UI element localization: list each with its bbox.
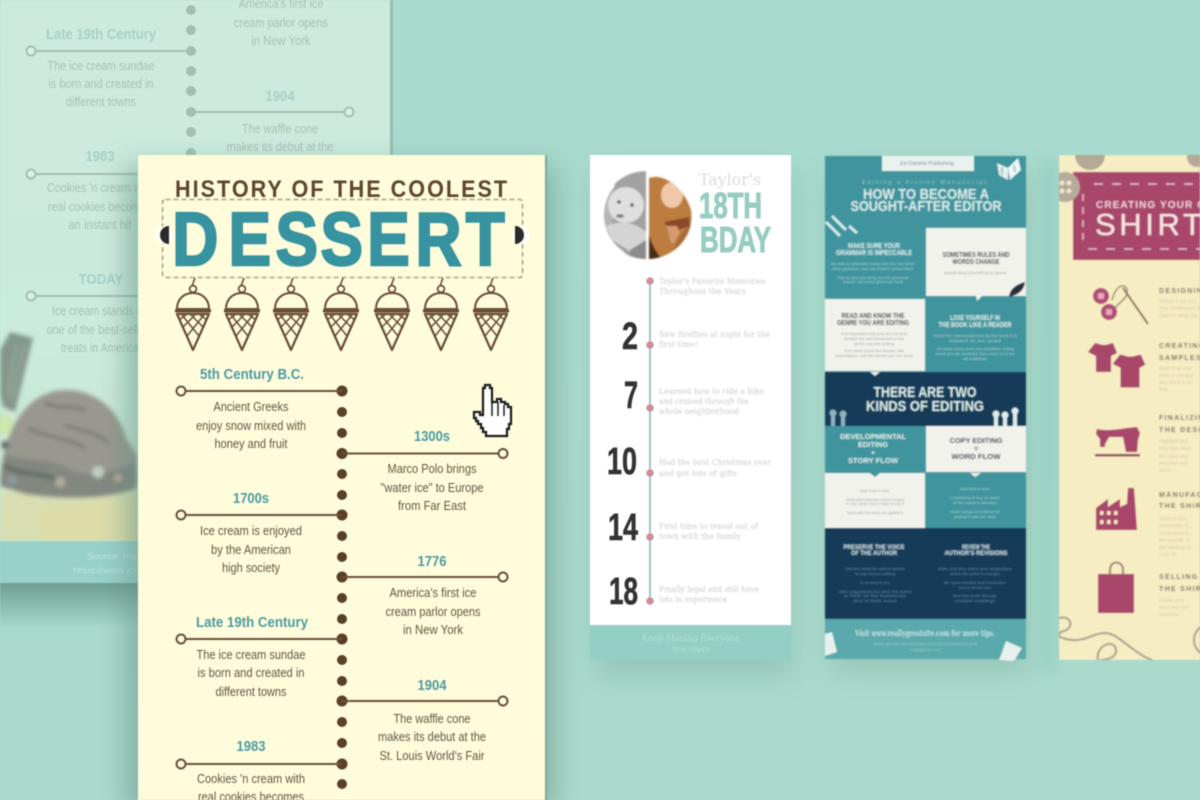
age numbers: 18 — [609, 571, 638, 613]
step text: manufacturing: companies to — [1159, 523, 1189, 529]
block: rules: always keep yourself up to speed — [944, 270, 1006, 275]
back timeline text: makes its debut at the — [226, 139, 334, 154]
step text: finalizing: done — [1159, 468, 1170, 474]
icon: open book — [997, 158, 1021, 180]
step text: creating samples — [1159, 343, 1200, 393]
entry: 1904: 1904 — [418, 678, 446, 694]
age numbers — [607, 316, 638, 613]
icons: pens — [830, 410, 846, 426]
block: grammar: MAKE SURE YOUR — [848, 243, 900, 250]
back timeline text: different towns — [66, 94, 136, 109]
entry: Late 19th Century — [196, 615, 308, 699]
step text: designing: Capture what you — [1159, 313, 1198, 319]
entry: 1776: cream parlor opens — [386, 604, 481, 619]
decorative pencil strokes icon — [826, 216, 857, 236]
subtitle: HISTORY OF THE COOLEST — [175, 175, 507, 202]
entry: 5th Century B.C.: Ancient Greeks — [214, 399, 289, 414]
block: genre: You must know the tropes, the — [844, 348, 905, 353]
back timeline text: Ice cream stands as — [52, 303, 148, 318]
block: lose yourself: THE BOOK LIKE A READER — [938, 322, 1012, 329]
selection box — [155, 200, 530, 278]
icon: buttons and needle — [1093, 286, 1148, 324]
step text: creating samples: and place it on — [1159, 380, 1192, 386]
age numbers: 2 — [622, 316, 638, 358]
entry: 1904: makes its debut at the — [378, 729, 486, 744]
header — [850, 180, 1002, 215]
step text: selling: business — [1159, 612, 1179, 618]
block: author notes: Offer suggestions but allow the author — [838, 589, 913, 594]
block: author notes: Make sure they add to your suggestions — [938, 566, 1012, 571]
block: author notes: before the author's changes — [950, 571, 1000, 576]
block: copy editing notes: Keep these in mind: — [960, 486, 990, 491]
step text: finalizing — [1159, 415, 1200, 474]
block: grammar: This is why you bring out the grammar — [837, 275, 910, 280]
block: genre — [825, 299, 925, 371]
entry: Late 19th Century: Late 19th Century — [196, 615, 308, 631]
block: author notes: that it is still their book — [959, 585, 991, 590]
back timeline text: 1904 — [266, 89, 294, 105]
step text: selling: start your bus — [1159, 605, 1190, 611]
panel: faded back infographic — [0, 0, 393, 583]
block: developmental editing: + — [871, 450, 875, 457]
block: grammar — [831, 243, 915, 284]
step text: finalizing: they like and — [1159, 461, 1187, 467]
block: author notes: possible roughings — [955, 598, 995, 603]
icon: factory — [1096, 488, 1137, 530]
entry: 1904 — [378, 678, 486, 763]
block: author notes: Do not rewrite the story — [860, 580, 890, 585]
back panel drop shadow — [0, 583, 393, 628]
step text: selling — [1159, 574, 1200, 618]
step text: designing — [1159, 288, 1200, 319]
decorative thread — [1059, 618, 1152, 660]
block: copy editing notes: Never change tone without an — [950, 509, 1000, 514]
icon: quill — [1009, 282, 1025, 297]
block: author notes: to say before editing — [855, 571, 895, 576]
header: HOW TO BECOME A — [863, 186, 989, 203]
back timeline text: Cookies 'n cream with — [47, 180, 153, 195]
back footer band: Source: http — [87, 552, 140, 561]
block: developmental editing: EDITING — [858, 442, 889, 449]
block: copy editing notes: Consistency is key, be aware — [950, 495, 1001, 500]
entry: 1700s: high society — [222, 560, 280, 575]
icon: corner button — [1058, 171, 1081, 203]
publisher tag — [882, 156, 974, 171]
icon: right note pages — [999, 641, 1022, 661]
step text: manufacturing — [1159, 492, 1200, 558]
block: author notes: Run the work through — [953, 593, 997, 598]
block: grammar: other grammar rules are broken correct them — [832, 266, 915, 271]
icon: hand cursor — [474, 385, 511, 436]
back timeline text: real cookies becomes — [48, 199, 152, 214]
back timeline text: is born and created in — [48, 76, 154, 91]
block: developmental notes — [825, 473, 925, 528]
entry: 1700s — [200, 491, 302, 575]
entry: 5th Century B.C.: enjoy snow mixed with — [196, 418, 306, 433]
entry: 1776: in New York — [403, 622, 463, 637]
block: lose yourself: Jot down every point you stumbled, noting — [936, 346, 1014, 351]
memory text: Learned how to ride a bike — [659, 387, 764, 396]
memory text: lots to experience — [659, 595, 727, 604]
entry: 1300s: Marco Polo brings — [388, 461, 477, 476]
photo: child and woman — [604, 171, 695, 262]
publisher tag: Ed Daniels Publishing — [900, 161, 954, 167]
title — [699, 170, 771, 260]
memory text: and got lots of gifts — [659, 469, 737, 478]
block: author notes: PRESERVE THE VOICE — [844, 545, 904, 551]
step text: manufacturing: Send to your — [1159, 516, 1188, 522]
block: author notes: Be open-minded and remember — [944, 580, 1007, 585]
block: developmental notes: Keep these in mind: — [860, 488, 890, 493]
back timeline connectors — [26, 46, 354, 300]
block: rules — [926, 228, 1026, 301]
step text: designing: Sketch it out and — [1159, 299, 1196, 305]
title: 18TH — [699, 185, 762, 226]
card 3 footer: Visit www.reallygreatsite.com for more tips. — [854, 628, 995, 638]
card footer: Stay Happy — [672, 646, 711, 653]
back timeline text: The ice cream sundae — [48, 58, 154, 73]
step text: manufacturing: consequence — [1159, 531, 1189, 537]
step text: finalizing: who they want — [1159, 446, 1192, 452]
age numbers: 10 — [607, 441, 637, 483]
step text: selling: SELLING — [1159, 574, 1198, 581]
entry: 1300s — [380, 429, 484, 513]
block: developmental editing: DEVELOPMENTAL — [840, 434, 907, 441]
back timeline dots — [186, 5, 196, 158]
block: author notes: REVIEW THE — [962, 545, 990, 551]
block: lose yourself: LOSE YOURSELF IN — [950, 315, 1000, 322]
title: BDAY — [700, 219, 771, 260]
icon: shirts — [1088, 343, 1146, 388]
back timeline text: an instant hit — [68, 217, 132, 232]
block: genre: genre you are editing — [854, 341, 894, 346]
step text: finalizing: like what wou — [1159, 454, 1189, 460]
icon: shopping bag — [1098, 562, 1134, 613]
block: copy editing notes: of the reader's attention — [953, 500, 997, 505]
card footer — [590, 625, 791, 660]
memory text: and cruised through the — [659, 397, 749, 406]
block: developmental notes: Work with the story, not against it — [847, 510, 904, 515]
entry: Late 19th Century: is born and created in — [198, 665, 304, 680]
entry: 5th Century B.C.: 5th Century B.C. — [200, 367, 304, 383]
block: author notes: OF THE AUTHOR — [851, 551, 898, 557]
memory text: Saw fireflies at night for the — [659, 330, 770, 339]
panel: creating your own shirt — [1050, 140, 1200, 660]
entry: 1983: Cookies 'n cream with — [197, 771, 305, 786]
block: grammar: GRAMMAR IS IMPECCABLE — [836, 250, 912, 257]
block: developmental editing: STORY FLOW — [848, 458, 898, 465]
block: developmental notes: Understand what the author is trying — [846, 497, 904, 502]
age numbers: 7 — [624, 375, 638, 417]
block: genre: expectations, and the clichés you can avoid — [835, 353, 913, 358]
block: author notes: Discuss what the author wishes — [845, 566, 905, 571]
step text: creating samples: Work it up and — [1159, 366, 1191, 372]
block: author notes: to have on the manuscript — [844, 593, 907, 598]
step text: selling: Frame your — [1159, 598, 1185, 604]
back footer band: https://www.ice — [73, 566, 140, 575]
entry: 1700s: Ice cream is enjoyed — [200, 523, 302, 538]
timeline spine dots — [336, 386, 348, 789]
entry: 1776: 1776 — [418, 554, 446, 570]
memory text: First time to travel out of — [659, 522, 759, 531]
block: author notes — [825, 528, 1026, 619]
memory text: first time! — [659, 340, 698, 349]
block: copy editing notes: author's ask for help — [954, 514, 997, 519]
memory text — [659, 277, 771, 604]
entry: 1904: St. Louis World's Fair — [380, 748, 485, 763]
card 4 background strip — [1040, 160, 1059, 670]
block: genre: GENRE YOU ARE EDITING — [837, 320, 909, 327]
header: SOUGHT-AFTER EDITOR — [850, 198, 1002, 215]
entry: 5th Century B.C.: honey and fruit — [214, 436, 288, 451]
block: grammar: expert, not every grammar nerd — [843, 279, 903, 284]
main title: DESSERT — [172, 197, 505, 281]
back timeline text: treats in America — [61, 340, 140, 355]
banner: two kinds of editing — [825, 372, 1026, 426]
ice cream photo — [0, 332, 140, 541]
timeline line and markers — [646, 277, 654, 605]
block: rules: SOMETIMES RULES AND — [942, 252, 1010, 259]
step text: manufacturing: cost, etc — [1159, 552, 1178, 558]
step text: creating samples: work in out and — [1159, 373, 1193, 379]
title: Taylor's — [699, 170, 761, 189]
main panel shadow — [126, 165, 554, 800]
block: lose yourself — [933, 315, 1017, 361]
entry: 1300s: "water ice" to Europe — [380, 480, 484, 495]
step text: manufacturing: the sample, to — [1159, 538, 1191, 544]
card 3 footer: reallygreat.com — [909, 647, 942, 652]
age numbers: 14 — [608, 507, 638, 549]
block: developmental editing — [840, 434, 907, 465]
card 3 footer: www.goodeditorstoday.com/spreadsheets.pdf — [873, 641, 978, 646]
block: copy editing notes — [950, 473, 1001, 519]
block: copy editing — [926, 426, 1026, 472]
card footer: Keep Shining Everyone — [642, 634, 740, 644]
back timeline text: 1983 — [86, 149, 114, 165]
entry: 1983 — [197, 739, 305, 800]
icon: sewing machine — [1095, 427, 1140, 456]
block: copy editing: = — [974, 446, 978, 453]
block: developmental notes: to say, what does it take to say it — [846, 501, 905, 506]
back timeline text — [46, 0, 334, 355]
memory text: Throughout the Years — [659, 287, 746, 296]
memory text: Taylor's Favorite Memories — [659, 277, 766, 286]
card 3 shadow — [830, 170, 1030, 670]
banner — [1073, 172, 1200, 260]
back timeline text: cream parlor opens — [234, 15, 328, 30]
entry: 1300s: 1300s — [414, 429, 450, 445]
memory text: whole neighborhood — [659, 407, 739, 416]
entry: 5th Century B.C. — [196, 367, 306, 451]
block: author notes: AUTHOR'S REVISIONS — [944, 551, 1008, 557]
block: grammar: Be able to articulate every rule you use when — [831, 261, 915, 266]
entry: 1983: 1983 — [236, 739, 266, 755]
entry: Late 19th Century: different towns — [216, 684, 287, 699]
icon row: ice cream cones — [175, 278, 509, 350]
block: genre: It is important that you are not just — [841, 331, 908, 336]
timeline connectors — [176, 386, 508, 768]
back timeline text: The waffle cone — [242, 121, 318, 136]
icon: left note pages — [825, 632, 837, 656]
block: rules: WORDS CHANGE — [952, 259, 1000, 266]
decorative buttons — [1074, 154, 1200, 171]
block: genre: familiar but well-immersed in the — [844, 336, 905, 341]
step text: manufacturing: the labeling on — [1159, 545, 1192, 551]
block: genre: READ AND KNOW THE — [842, 313, 905, 320]
panel: 18th birthday timeline — [590, 155, 791, 660]
decorative large button — [1194, 624, 1200, 656]
entry: 1776 — [386, 554, 481, 637]
header: Editing a Fiction Manuscript — [862, 180, 987, 186]
back timeline text: in New York — [252, 33, 311, 48]
block: lose yourself: Read the manuscript first as the book it is — [933, 333, 1017, 338]
block: author notes: and in their voice — [853, 598, 898, 603]
block: lose yourself: edits — [963, 356, 987, 361]
block: lose yourself: meant to be read — [949, 338, 1001, 343]
back timeline text: one of the best-selling — [46, 322, 154, 337]
entry: Late 19th Century: The ice cream sundae — [196, 647, 306, 662]
memory text: Had the best Christmas ever — [659, 458, 771, 467]
back footer band — [0, 540, 138, 584]
memory text: Finally legal and still have — [659, 585, 759, 594]
card 2 shadow — [596, 170, 792, 675]
step text: finalizing: Highlight any — [1159, 439, 1188, 445]
banner: two kinds of editing: THERE ARE TWO — [874, 384, 977, 401]
block: copy editing: COPY EDITING — [950, 438, 1003, 445]
panel: how to become an editor — [825, 156, 1026, 661]
step text: creating samples: that — [1159, 387, 1168, 393]
banner: two kinds of editing: KINDS OF EDITING — [866, 398, 984, 415]
entry: 1904: The waffle cone — [394, 711, 470, 726]
panel: dessert history — [138, 155, 547, 800]
block: lose yourself: where you are confused, then move on to the — [935, 351, 1016, 356]
card 3 footer — [825, 619, 1026, 661]
entry: 1776: America's first ice — [390, 585, 476, 600]
back timeline text: TODAY — [78, 272, 124, 288]
entry: 1700s: by the American — [211, 542, 291, 557]
entry: 1300s: from Far East — [398, 498, 466, 513]
memory text: town with the family — [659, 532, 741, 541]
entry: 1700s: 1700s — [233, 491, 269, 507]
back timeline text: Late 19th Century — [46, 27, 156, 43]
block: copy editing: WORD FLOW — [952, 454, 1001, 461]
